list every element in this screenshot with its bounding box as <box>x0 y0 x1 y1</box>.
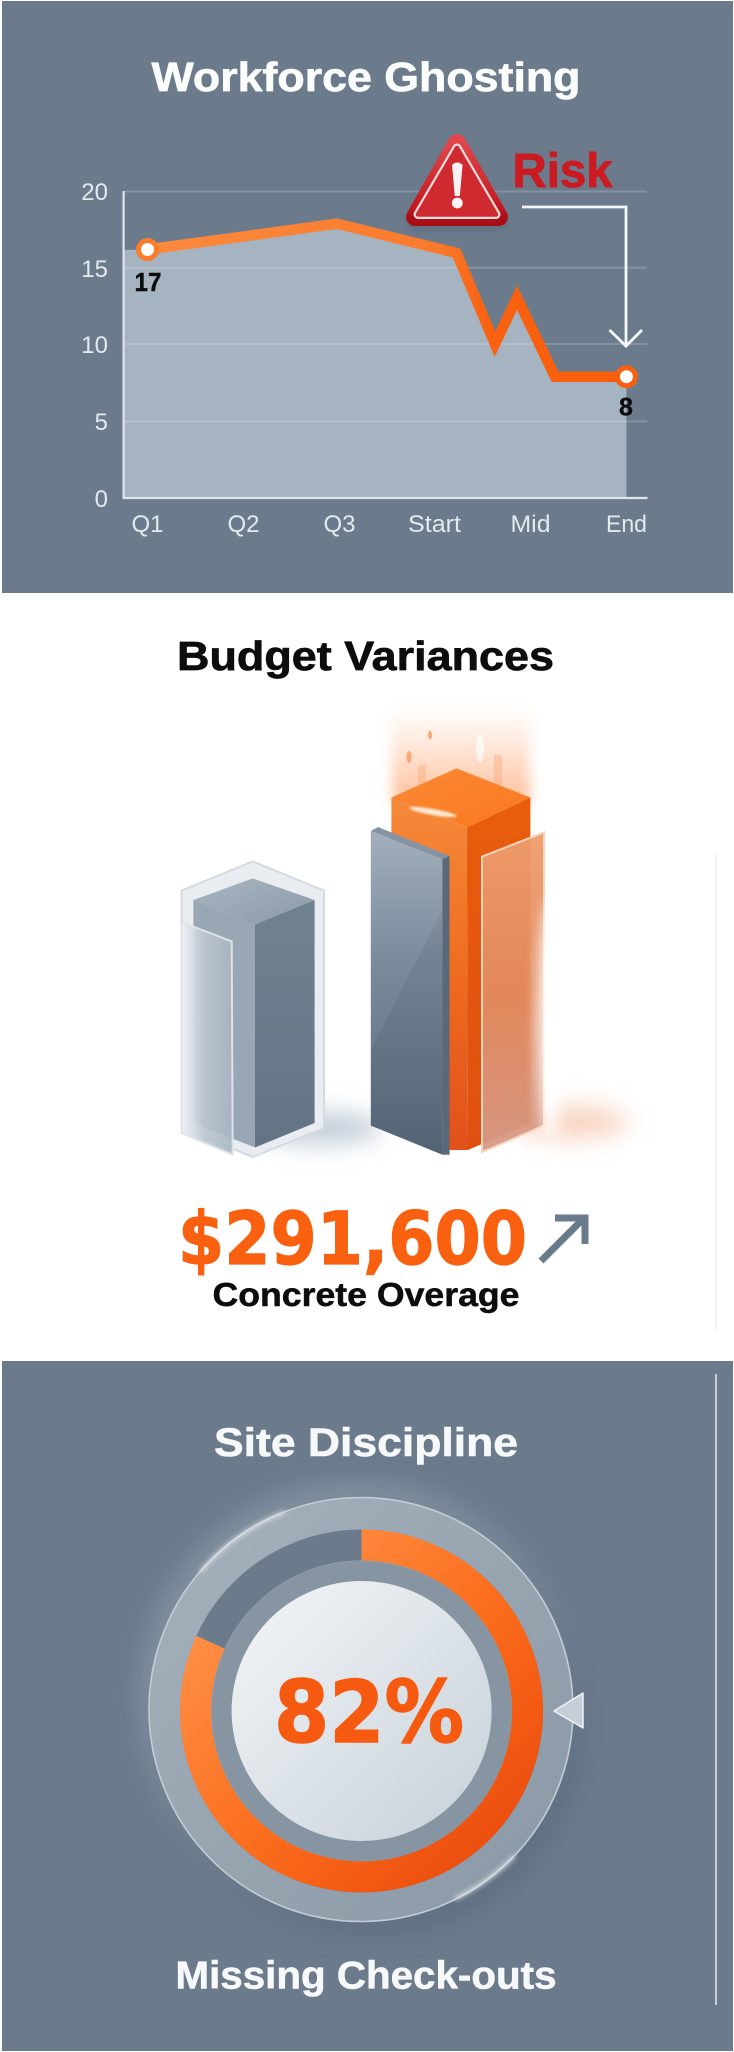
value label 17: 17 <box>134 267 162 297</box>
x axis labels: Start <box>408 511 461 538</box>
bar: prior budget (glass and grey) <box>182 862 324 1157</box>
orange glass panel <box>482 832 544 1152</box>
glow above bar <box>392 708 530 802</box>
end marker <box>615 365 638 388</box>
panel: budget variances <box>0 593 734 1361</box>
value: 82%: 82% <box>274 1663 464 1763</box>
y axis labels: 5 <box>95 409 108 436</box>
icon: up-right arrow <box>541 1218 585 1261</box>
centre disc <box>232 1581 492 1841</box>
icon: warning triangle <box>415 143 499 222</box>
y axis labels: 10 <box>81 332 108 359</box>
panel: workforce ghosting <box>2 1 733 593</box>
label: Missing Check-outs: Missing Check-outs <box>176 1954 556 1998</box>
x axis labels: Mid <box>510 511 550 538</box>
data line <box>148 224 626 377</box>
grey front panel <box>442 856 450 1155</box>
value: $291,600: $291,600 <box>178 1197 527 1282</box>
orange progress arc 82% <box>196 1545 528 1877</box>
start marker <box>136 238 159 261</box>
x axis labels <box>131 511 647 538</box>
y axis labels <box>81 179 108 513</box>
bar: concrete overage (orange and grey) <box>371 708 564 1155</box>
y axis labels: 0 <box>95 486 108 513</box>
x axis labels: Q1 <box>131 511 164 538</box>
heading: Budget Variances: Budget Variances <box>177 633 554 679</box>
panel: site discipline <box>2 1361 733 2051</box>
x axis labels: End <box>606 511 647 538</box>
label: Concrete Overage: Concrete Overage <box>212 1276 520 1313</box>
glass front panel <box>182 922 233 1155</box>
arrow: risk to end point <box>522 207 642 346</box>
y axis labels: 15 <box>81 256 108 283</box>
y axis labels: 20 <box>81 179 108 206</box>
heading: Workforce Ghosting: Workforce Ghosting <box>152 54 580 100</box>
donut gauge <box>139 1481 584 1936</box>
shadows under bars <box>258 1106 628 1144</box>
heading: Site Discipline: Site Discipline <box>214 1421 518 1465</box>
line chart <box>81 179 648 538</box>
label: Risk: Risk <box>512 145 613 198</box>
value label 8: 8 <box>619 394 633 422</box>
x axis labels: Q2 <box>227 511 260 538</box>
x axis labels: Q3 <box>323 511 356 538</box>
pointer triangle <box>554 1693 583 1728</box>
